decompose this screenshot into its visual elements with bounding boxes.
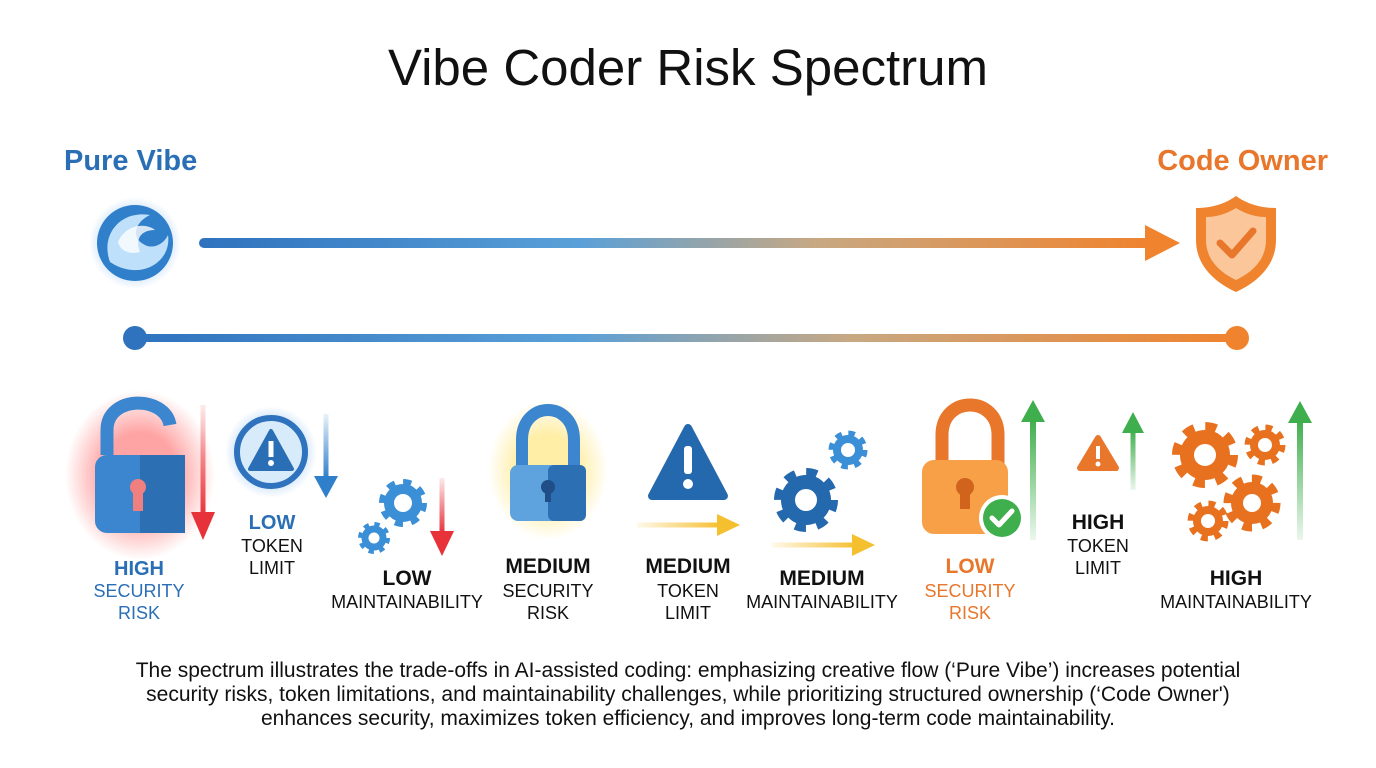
arrow: spectrum (199, 225, 1180, 261)
item: low token limit: LIMIT (249, 558, 295, 578)
item: medium token limit: MEDIUM (645, 555, 731, 578)
description text (136, 659, 1240, 730)
title: Vibe Coder Risk Spectrum (388, 39, 988, 96)
label: Code Owner: Code Owner (1157, 145, 1328, 177)
spectrum line (123, 326, 1249, 350)
item: low security risk: RISK (949, 603, 991, 623)
item: high security risk: RISK (118, 603, 160, 623)
item: high security risk (65, 390, 215, 623)
item: medium token limit: TOKEN (657, 581, 719, 601)
item: high maintainability (1160, 401, 1312, 612)
item: low token limit (225, 406, 338, 578)
item: medium token limit (637, 428, 740, 623)
item: high token limit: HIGH (1072, 511, 1124, 534)
item: low token limit: TOKEN (241, 536, 303, 556)
item: high token limit: LIMIT (1075, 558, 1121, 578)
label: Pure Vibe: Pure Vibe (64, 145, 197, 177)
description text: enhances security, maximizes token efficiency, and improves long-term code maintainability. (261, 707, 1115, 730)
item: high security risk: SECURITY (93, 581, 185, 601)
item: high security risk: HIGH (114, 558, 164, 580)
item: medium maintainability (746, 434, 898, 612)
icon: shield (1196, 196, 1276, 292)
item: medium security risk (488, 400, 608, 623)
description text: The spectrum illustrates the trade-offs in AI-assisted coding: emphasizing creative flow (‘Pure Vibe’) increases potential (136, 659, 1240, 682)
item: medium token limit: LIMIT (665, 603, 711, 623)
item: low security risk: SECURITY (924, 581, 1016, 601)
item: high token limit: TOKEN (1067, 536, 1129, 556)
item: high maintainability: HIGH (1210, 567, 1262, 590)
item: medium maintainability: MAINTAINABILITY (746, 592, 898, 612)
item: low maintainability: LOW (383, 567, 432, 590)
item: low maintainability: MAINTAINABILITY (331, 592, 483, 612)
item: medium security risk: SECURITY (502, 581, 594, 601)
description text: security risks, token limitations, and maintainability challenges, while prioritizing structured ownership (‘Code Owner') (146, 683, 1230, 706)
icon: wave (89, 197, 181, 289)
item: medium security risk: RISK (527, 603, 569, 623)
item: low token limit: LOW (249, 512, 295, 534)
item: low security risk: LOW (946, 555, 995, 578)
item: medium security risk: MEDIUM (505, 555, 591, 578)
item: low maintainability (331, 478, 483, 612)
item: medium maintainability: MEDIUM (779, 567, 865, 590)
item: low security risk (922, 400, 1045, 623)
item: high maintainability: MAINTAINABILITY (1160, 592, 1312, 612)
item: high token limit (1067, 412, 1144, 578)
